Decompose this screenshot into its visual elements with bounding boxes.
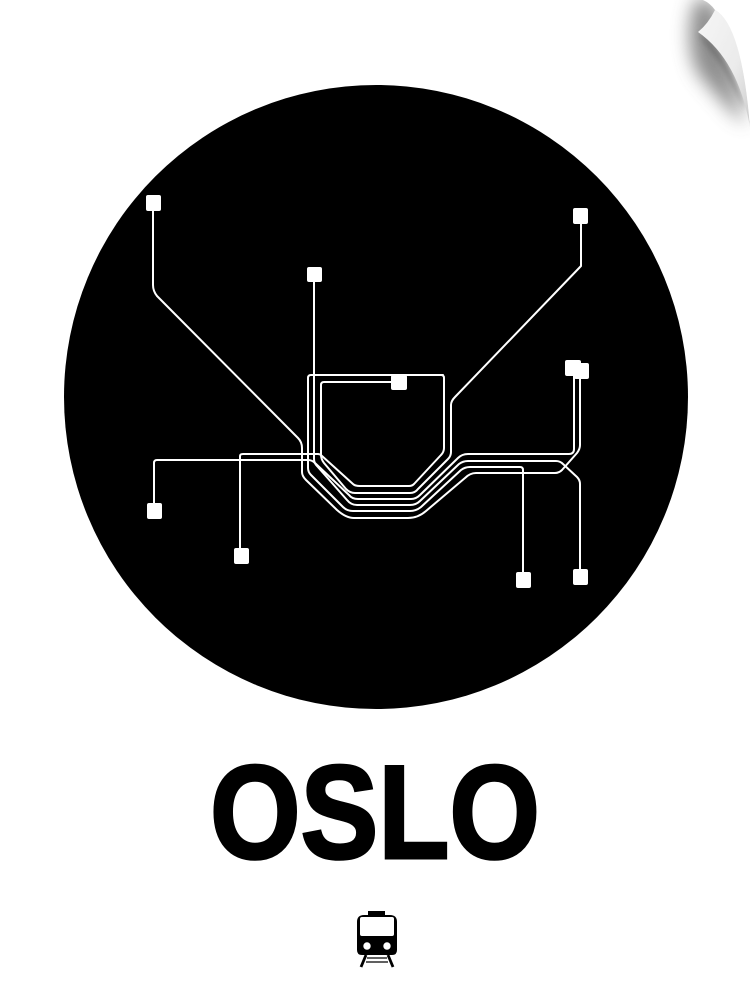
station: northeast: [573, 208, 588, 224]
line: northeast branch to centre: [321, 216, 581, 493]
line: southwest station to box: [240, 375, 444, 556]
station: north: [307, 267, 322, 282]
station: northwest: [146, 195, 161, 211]
station: southwest: [234, 548, 249, 564]
metro map: [146, 195, 589, 588]
station: east lower: [574, 363, 589, 379]
station: east upper: [565, 360, 581, 376]
station: southeast: [573, 569, 588, 585]
station: centre: [391, 375, 407, 390]
icon: train: [357, 911, 397, 967]
page curl: [689, 0, 750, 127]
station: south: [516, 572, 531, 588]
stations: [146, 195, 589, 588]
black circle: [64, 85, 688, 709]
line: west station to east: [154, 368, 574, 511]
title: OSLO: [210, 739, 540, 887]
line: northwest branch to east: [153, 203, 580, 518]
station: west: [147, 503, 162, 519]
line: north station to south: [314, 274, 580, 577]
line: box top to southeast: [308, 375, 523, 580]
